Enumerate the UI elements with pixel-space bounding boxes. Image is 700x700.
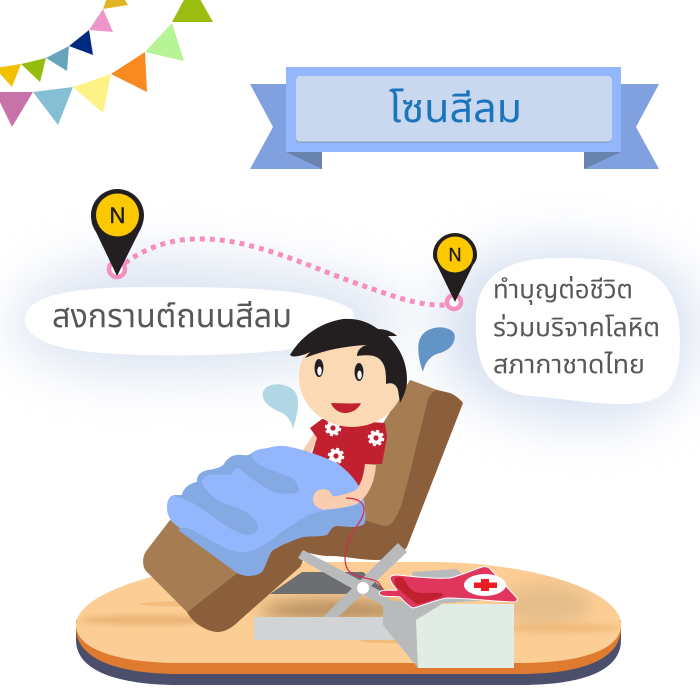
stand: leg rising right xyxy=(323,543,407,617)
stand: base xyxy=(254,617,404,640)
stand: seat support xyxy=(270,572,390,594)
person xyxy=(290,319,407,500)
map pin: destination xyxy=(433,233,477,309)
speech bubble: right xyxy=(476,258,680,404)
event description text xyxy=(493,274,660,379)
title banner xyxy=(250,67,659,169)
shirt flowers xyxy=(326,422,382,462)
dotted route xyxy=(125,239,446,305)
far arm xyxy=(303,432,318,453)
stand: leg rising left xyxy=(298,550,390,606)
right eye xyxy=(354,363,364,381)
blanket lower shadow band xyxy=(178,498,365,576)
blanket xyxy=(167,446,365,576)
recliner chair xyxy=(143,380,463,632)
background glow: right xyxy=(440,246,696,425)
event description text: ร่วมบริจาคโลหิต xyxy=(493,312,660,342)
speech bubble: left xyxy=(25,287,354,355)
map pin: start xyxy=(91,189,144,277)
location label: left: สงกรานต์ถนนสีลม xyxy=(52,297,292,334)
hair xyxy=(290,319,407,403)
left eye xyxy=(314,359,324,377)
red cross label xyxy=(464,574,506,596)
map pin: start: N xyxy=(110,203,125,228)
shirt xyxy=(310,419,387,500)
arm and hand xyxy=(313,464,376,510)
mouth xyxy=(331,403,361,413)
blood inside bag xyxy=(395,577,443,604)
box top xyxy=(412,569,490,605)
sweat drop: blue xyxy=(418,327,455,372)
bunting flags xyxy=(0,0,213,127)
blood bag xyxy=(379,567,517,608)
map pin: destination: N xyxy=(448,245,462,265)
title text: โซนสีลม xyxy=(389,87,522,131)
platform xyxy=(76,562,621,685)
box xyxy=(383,600,514,668)
event description text: สภากาชาดไทย xyxy=(493,349,645,379)
stand pivot xyxy=(357,582,369,594)
head xyxy=(299,327,405,427)
blanket folds xyxy=(174,453,299,535)
event description text: ทำบุญต่อชีวิต xyxy=(493,274,633,305)
background glow: left xyxy=(10,255,403,376)
IV tube xyxy=(345,498,384,591)
sweat drop: light xyxy=(263,384,298,429)
